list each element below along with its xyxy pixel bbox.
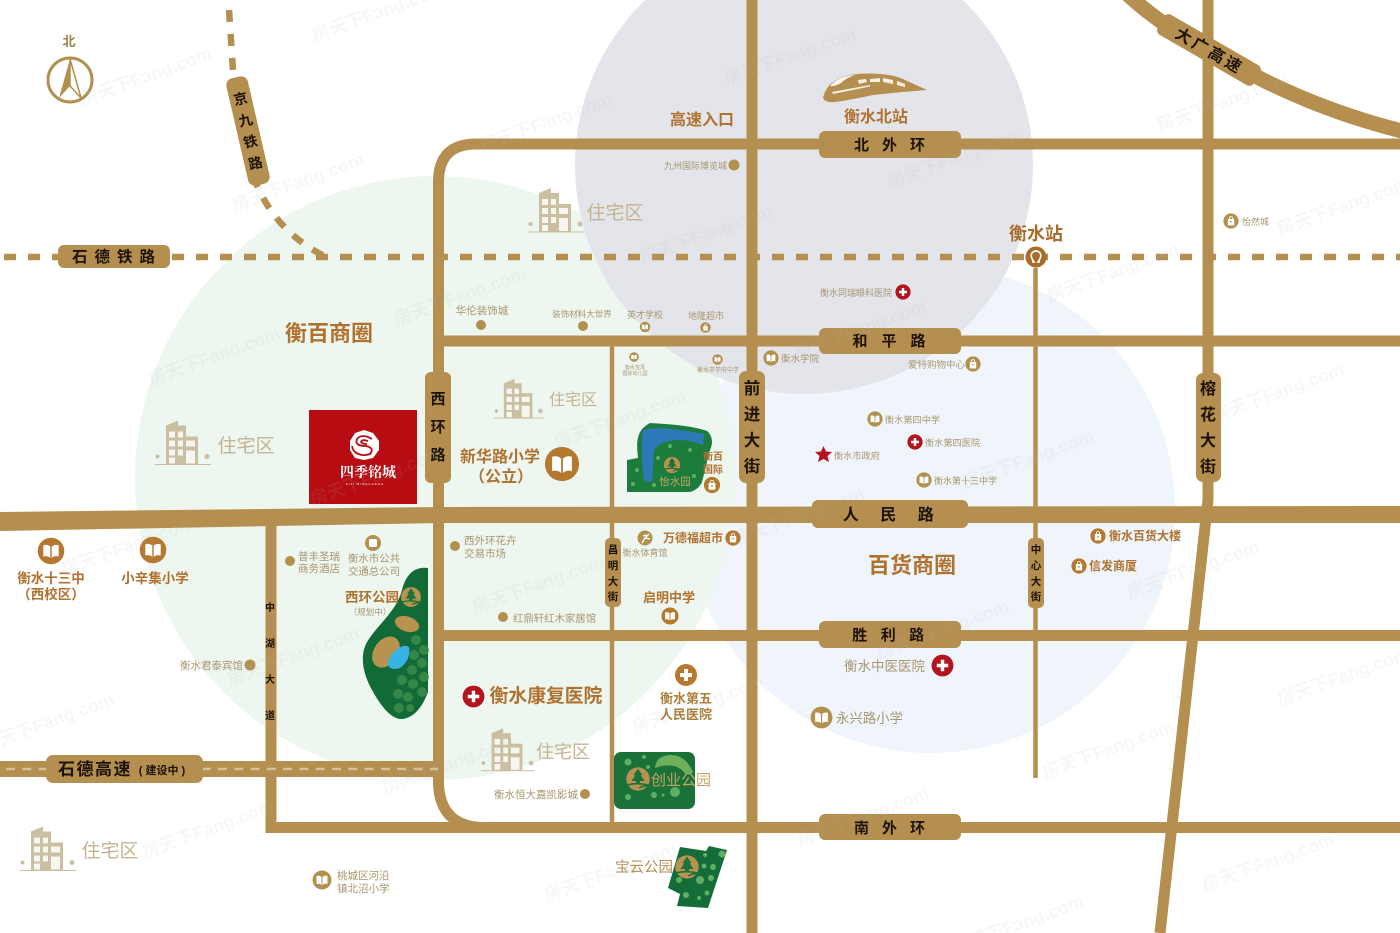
poi: 永兴路小学: 永兴路小学 xyxy=(836,711,903,726)
residential: south west xyxy=(20,826,139,871)
label: 西环路 xyxy=(425,372,451,483)
poi: 衡水学院 xyxy=(763,350,820,366)
label: 西环路: 环 xyxy=(430,419,446,436)
label: 宝云公园 xyxy=(615,855,699,879)
label: 中湖大道: 中 xyxy=(265,601,275,614)
block: 四季铭城 project logo: 四季铭城 xyxy=(340,464,396,481)
label: 京九铁路: 九 xyxy=(237,111,254,130)
circle: 百货商圈 zone xyxy=(687,265,1175,753)
poi: 衡水体育馆: 衡水体育馆 xyxy=(622,547,668,558)
label: 昌明大街: 昌 xyxy=(608,544,618,556)
compass north arrow xyxy=(48,34,92,102)
label: 京九铁路: 铁 xyxy=(242,132,259,151)
watermarks: 房天下Fang.com xyxy=(794,783,932,850)
poi: 衡水第五人民医院: 人民医院 xyxy=(660,707,712,722)
label: 西环路: 路 xyxy=(430,446,446,464)
watermarks: 房天下Fang.com xyxy=(629,671,767,738)
label: 中湖大道: 大 xyxy=(265,673,275,686)
label: 前进大街: 前 xyxy=(744,379,760,398)
label: 石德高速 xyxy=(46,755,203,783)
watermarks: 房天下Fang.com xyxy=(77,43,215,110)
watermarks: 房天下Fang.com xyxy=(1039,716,1177,783)
poi: 桃城区河沿镇北沼小学 xyxy=(312,869,390,895)
park: 宝云公园 xyxy=(668,846,727,908)
circle: 衡百商圈 zone xyxy=(135,176,735,780)
label: 宝云公园: 宝云公园 xyxy=(615,859,673,876)
watermarks: 房天下Fang.com xyxy=(145,323,283,390)
label: 前进大街: 进 xyxy=(744,405,761,424)
poi: 英才学校 xyxy=(627,309,663,332)
label: 西环公园 xyxy=(345,587,421,617)
label: 和平路 xyxy=(819,328,961,354)
watermarks: 房天下Fang.com xyxy=(59,513,197,580)
label: 南外环: 南外环 xyxy=(854,819,938,837)
poi: 衡水第四医院: 衡水第四医院 xyxy=(925,437,980,448)
label: 石德铁路: 石德铁路 xyxy=(72,247,162,266)
label: 中心大街: 中 xyxy=(1031,543,1041,556)
poi: 启明中学: 启明中学 xyxy=(643,590,695,605)
poi: 衡水康复医院: 衡水康复医院 xyxy=(490,684,603,706)
poi: 装饰材料大世界: 装饰材料大世界 xyxy=(552,309,612,319)
poi: 启明中学 xyxy=(643,590,695,625)
label: 中湖大道 xyxy=(265,601,275,722)
watermarks: 房天下Fang.com xyxy=(139,796,277,863)
poi: 衡水第四中学 xyxy=(867,411,940,427)
poi: 西外环花卉交易市场: 交易市场 xyxy=(464,547,506,560)
label: 北外环 xyxy=(819,131,961,158)
label: 创业公园 xyxy=(626,767,711,791)
label: 石德高速: 石德高速 xyxy=(58,759,132,779)
circle: 衡水北站 zone xyxy=(575,0,1033,394)
poi: 衡水百货大楼: 衡水百货大楼 xyxy=(1109,528,1181,543)
label: 中湖大道: 湖 xyxy=(265,637,275,650)
poi: 爱特购物中心 xyxy=(908,356,981,372)
watermarks: 房天下Fang.com xyxy=(379,731,517,798)
poi: 衡水十三中 西校区 xyxy=(17,538,85,602)
logo: 怡水园: 怡水园 xyxy=(659,475,691,488)
poi: 衡水中医医院 xyxy=(844,655,953,676)
label: 中心大街 xyxy=(1028,538,1044,608)
label: 石德铁路 xyxy=(58,245,170,268)
residential: south west: 住宅区 xyxy=(81,840,139,862)
residential: upper xyxy=(528,187,644,232)
label: 京九铁路 xyxy=(225,75,271,187)
watermarks: 房天下Fang.com xyxy=(469,551,607,618)
label: 胜利路 xyxy=(819,621,961,648)
watermarks: 房天下Fang.com xyxy=(1154,69,1292,136)
poi: 衡水同瑞眼科医院 xyxy=(820,284,911,300)
residential: 新华路: 住宅区 xyxy=(549,391,597,409)
icon: high speed train xyxy=(823,74,927,102)
poi: 永兴路小学 xyxy=(811,707,903,728)
watermarks: 房天下Fang.com xyxy=(1209,359,1347,426)
label: 中心大街: 心 xyxy=(1031,560,1042,572)
label: 京九铁路: 路 xyxy=(247,154,264,173)
watermarks: 房天下Fang.com xyxy=(307,443,445,510)
poi: 怡然城 xyxy=(1223,213,1269,229)
poi: 衡水市学府中学: 衡水市学府中学 xyxy=(697,366,739,374)
poi: 衡水宝泽国际幼儿园: 国际幼儿园 xyxy=(622,370,648,377)
heading: 衡百商圈: 衡百商圈 xyxy=(285,321,373,346)
residential: south centre: 住宅区 xyxy=(536,742,590,762)
poi: 衡水第四中学: 衡水第四中学 xyxy=(885,414,940,425)
watermarks: 房天下Fang.com xyxy=(224,623,362,690)
poi: 桃城区河沿镇北沼小学: 桃城区河沿 xyxy=(337,869,390,882)
poi: 衡水十三中 西校区: （西校区） xyxy=(17,586,85,602)
compass north arrow: 北 xyxy=(62,34,76,49)
railway: 京九铁路 xyxy=(229,10,326,257)
label: 京九铁路: 京 xyxy=(232,89,249,108)
poi: 衡水中医医院: 衡水中医医院 xyxy=(844,659,925,674)
block: 四季铭城 project logo: SIJI MINGCHENG xyxy=(346,482,384,486)
poi: 爱特购物中心: 爱特购物中心 xyxy=(908,359,966,371)
label: 前进大街 xyxy=(739,371,765,483)
park: 怡水园 xyxy=(627,423,712,492)
poi: 衡水第十三中学: 衡水第十三中学 xyxy=(934,475,997,486)
poi: 桃城区河沿镇北沼小学: 镇北沼小学 xyxy=(337,882,390,895)
label: 中心大街: 大 xyxy=(1031,575,1042,588)
watermarks: 房天下Fang.com xyxy=(637,201,775,268)
label: 石德高速: ( 建设中 ) xyxy=(139,763,186,777)
poi: 衡水市公共交通总公司: 交通总公司 xyxy=(348,565,400,578)
watermarks: 房天下Fang.com xyxy=(874,596,1012,663)
poi: 万德福超市: 万德福超市 xyxy=(663,530,723,545)
poi: 衡水恒大嘉凯影城: 衡水恒大嘉凯影城 xyxy=(494,788,578,801)
residential: west: 住宅区 xyxy=(217,435,275,457)
label: 和平路: 和平路 xyxy=(852,332,940,350)
label: 大广高速 xyxy=(1155,12,1263,88)
poi: 西外环花卉交易市场 xyxy=(450,534,516,560)
label: 西环公园: 西环公园 xyxy=(345,590,399,605)
station: 衡水站 xyxy=(1009,224,1063,268)
label: 昌明大街 xyxy=(605,538,621,607)
watermarks: 房天下Fang.com xyxy=(1199,829,1337,896)
poi: 地隆超市 xyxy=(688,310,724,333)
poi: 西外环花卉交易市场: 西外环花卉 xyxy=(464,534,516,547)
label: 榕花大街: 榕 xyxy=(1200,379,1216,398)
poi: 英才学校: 英才学校 xyxy=(627,309,663,320)
poi: 小辛集小学 xyxy=(121,537,189,586)
park: 西环公园 xyxy=(363,568,429,719)
poi: 装饰材料大世界 xyxy=(552,309,612,331)
poi: 地隆超市: 地隆超市 xyxy=(688,310,724,321)
poi: 普丰圣瑞商务酒店: 商务酒店 xyxy=(298,562,340,575)
poi: 衡水君泰宾馆: 衡水君泰宾馆 xyxy=(180,659,243,672)
label: 榕花大街: 街 xyxy=(1200,458,1216,476)
watermarks: 房天下Fang.com xyxy=(1124,536,1262,603)
poi: 衡水市公共交通总公司 xyxy=(348,535,400,578)
poi: 华伦装饰城: 华伦装饰城 xyxy=(456,304,509,317)
poi: 衡水市政府: 衡水市政府 xyxy=(834,450,880,461)
poi: 怡然城: 怡然城 xyxy=(1242,216,1269,227)
poi: 衡水体育馆 xyxy=(622,530,668,558)
poi: 信发商厦: 信发商厦 xyxy=(1089,558,1137,573)
poi: 普丰圣瑞商务酒店: 普丰圣瑞 xyxy=(298,550,340,563)
label: 昌明大街: 明 xyxy=(608,560,618,572)
label: 高速入口: 高速入口 xyxy=(670,110,734,129)
label: 中湖大道: 道 xyxy=(265,709,275,722)
label: 衡水北站: 衡水北站 xyxy=(844,107,908,126)
label: 西环公园: （规划中） xyxy=(349,607,391,617)
label: 南外环 xyxy=(819,814,961,840)
railway: 石德铁路 xyxy=(4,254,1400,260)
poi: 小辛集小学: 小辛集小学 xyxy=(121,570,189,586)
label: 人民路: 人民路 xyxy=(843,505,955,524)
poi: 衡水同瑞眼科医院: 衡水同瑞眼科医院 xyxy=(820,287,892,298)
poi: 衡百国际 xyxy=(703,450,723,493)
label: 前进大街: 街 xyxy=(744,457,760,476)
poi: 衡水市政府 xyxy=(815,446,880,462)
label: 人民路 xyxy=(812,500,968,528)
watermarks: 房天下Fang.com xyxy=(1044,239,1182,306)
poi: 信发商厦 xyxy=(1071,558,1137,574)
watermarks: 房天下Fang.com xyxy=(551,386,689,453)
block: 四季铭城 project logo xyxy=(309,410,417,504)
watermarks: 房天下Fang.com xyxy=(791,296,929,363)
label: 前进大街: 大 xyxy=(744,431,760,450)
label: 榕花大街: 花 xyxy=(1200,405,1216,424)
label: 昌明大街: 街 xyxy=(608,590,619,603)
poi: 万德福超市 xyxy=(663,530,741,546)
poi: 衡水市公共交通总公司: 衡水市公共 xyxy=(348,552,400,565)
poi: 新华路小学: （公立） xyxy=(469,467,533,486)
label: 中心大街: 街 xyxy=(1031,590,1042,603)
poi: 衡水市学府中学 xyxy=(697,354,739,374)
watermarks: 房天下Fang.com xyxy=(959,426,1097,493)
watermarks: 房天下Fang.com xyxy=(541,839,679,906)
watermarks: 房天下Fang.com xyxy=(721,23,859,90)
park: 创业公园 xyxy=(614,752,695,809)
label: 榕花大街: 大 xyxy=(1200,432,1216,450)
label: 西环路: 西 xyxy=(430,391,446,408)
residential: south centre xyxy=(481,727,590,771)
heading: 百货商圈: 百货商圈 xyxy=(868,553,956,578)
watermarks: 房天下Fang.com xyxy=(391,263,529,330)
poi: 衡水十三中 西校区: 衡水十三中 xyxy=(17,570,85,586)
residential: west xyxy=(155,420,275,465)
poi: 衡水宝泽国际幼儿园 xyxy=(622,352,648,377)
label: 创业公园: 创业公园 xyxy=(651,772,711,789)
poi: 衡百国际: 衡百 xyxy=(703,450,723,463)
poi: 红鼎轩红木家居馆: 红鼎轩红木家居馆 xyxy=(513,612,596,625)
poi: 华伦装饰城 xyxy=(456,304,509,330)
label: 胜利路: 胜利路 xyxy=(852,626,938,644)
poi: 衡水第十三中学 xyxy=(916,472,997,488)
poi: 衡水第五人民医院: 衡水第五 xyxy=(660,691,712,706)
label: 大广高速: 大广高速 xyxy=(1172,24,1247,78)
label: 九州国际博览城: 九州国际博览城 xyxy=(664,160,727,171)
residential: upper: 住宅区 xyxy=(586,202,644,224)
watermarks: 房天下Fang.com xyxy=(729,483,867,550)
residential: 新华路 xyxy=(494,378,597,419)
poi: 新华路小学: 新华路小学 xyxy=(460,447,540,466)
poi: 衡水学院: 衡水学院 xyxy=(781,353,820,365)
poi: 普丰圣瑞商务酒店 xyxy=(285,550,340,575)
watermarks: 房天下Fang.com xyxy=(477,89,615,156)
logo: 怡水园 xyxy=(659,457,691,488)
station: 衡水站: 衡水站 xyxy=(1009,224,1063,244)
poi: 衡水第五人民医院 xyxy=(660,664,712,722)
watermarks: 房天下Fang.com xyxy=(229,149,367,216)
watermarks: 房天下Fang.com xyxy=(884,126,1022,193)
label: 榕花大街 xyxy=(1196,373,1221,482)
poi: 衡水宝泽国际幼儿园: 衡水宝泽 xyxy=(625,364,645,371)
poi: 衡百国际: 国际 xyxy=(703,463,723,476)
label: 北外环: 北外环 xyxy=(854,136,938,154)
poi: 新华路小学 xyxy=(460,447,579,486)
poi: 衡水第四医院 xyxy=(907,434,980,450)
label: 昌明大街: 大 xyxy=(608,575,619,588)
